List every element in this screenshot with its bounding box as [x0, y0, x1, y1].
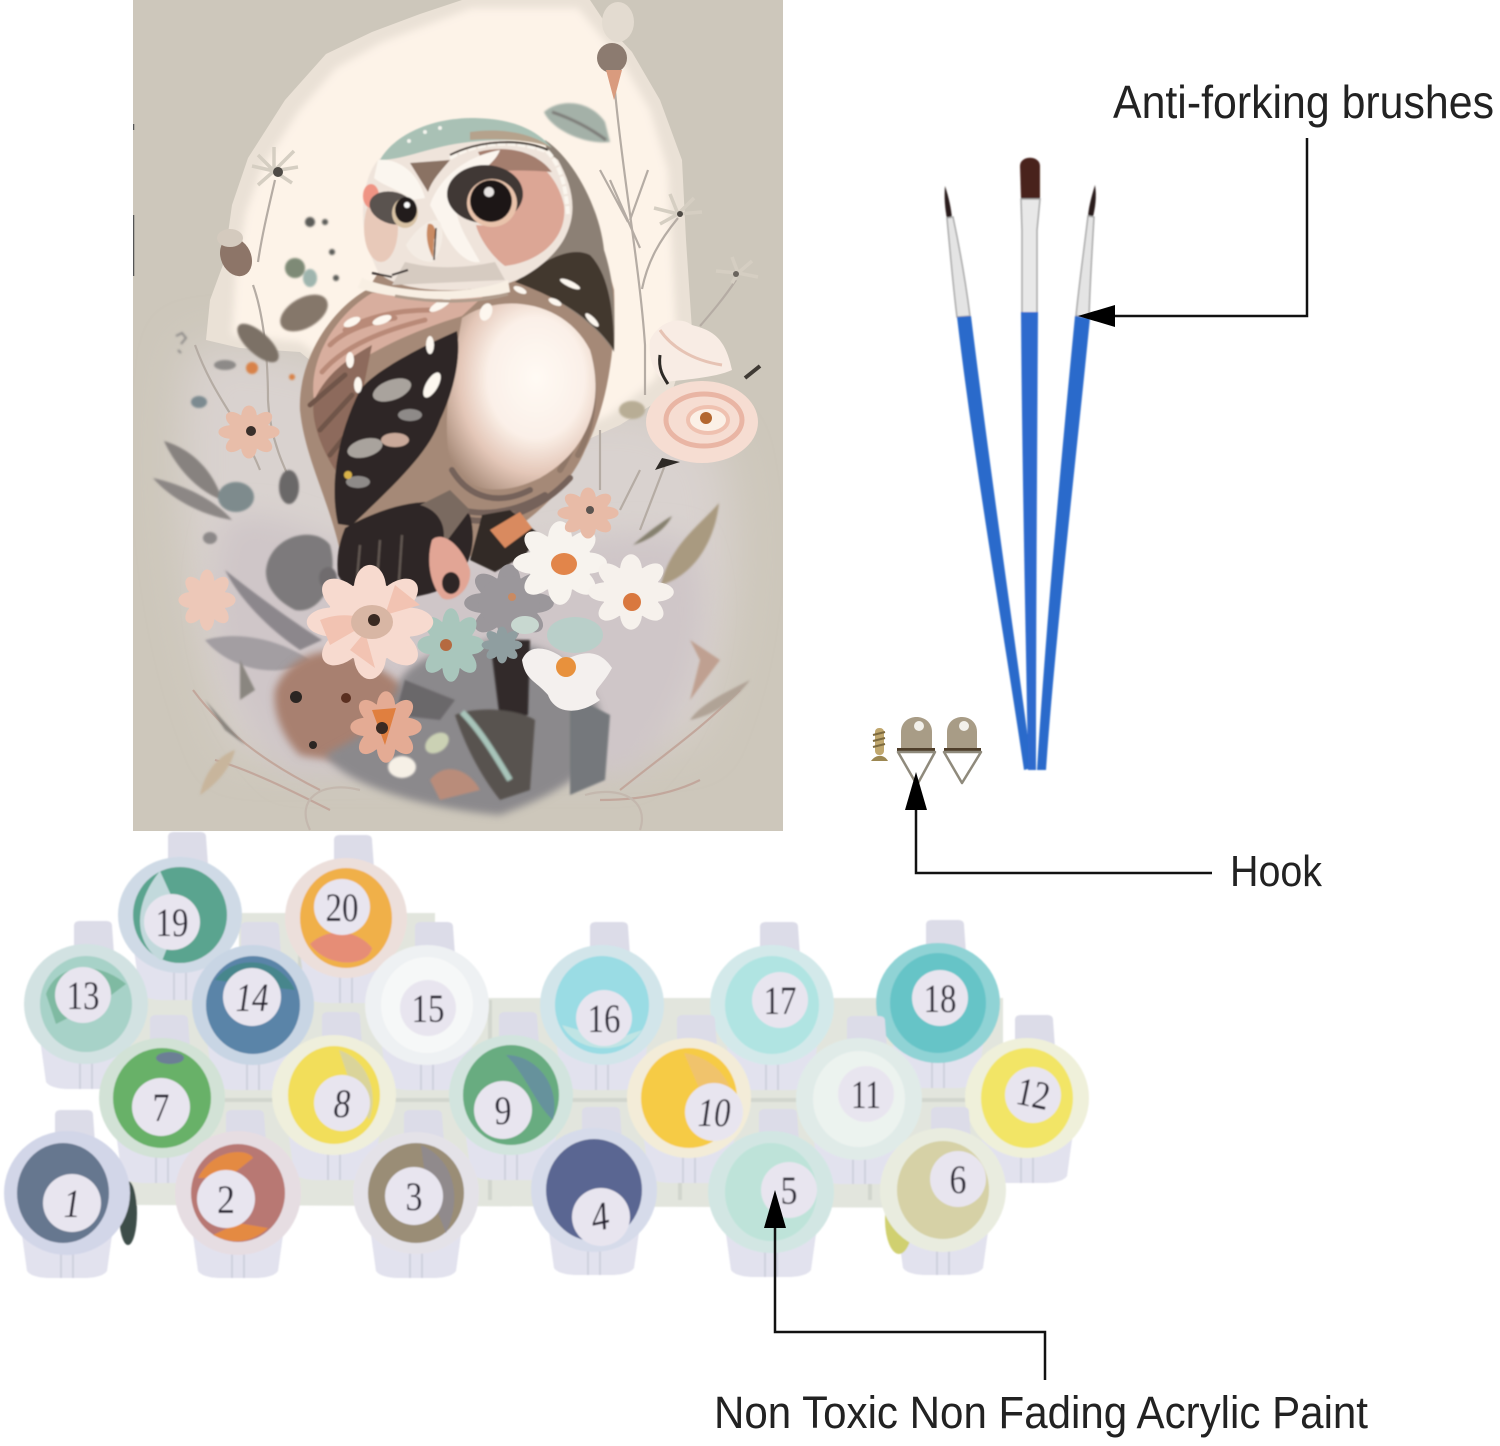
pot 11 — [796, 1016, 922, 1184]
brushes arrow — [1078, 138, 1307, 327]
lilac haze behind flowers — [182, 345, 732, 750]
owl back feathers — [515, 252, 614, 350]
callout: anti-forking brushes — [1078, 76, 1494, 327]
translucent tray — [130, 913, 1003, 1208]
middle brush — [1020, 158, 1040, 770]
brow band — [430, 150, 500, 262]
flowers — [178, 320, 760, 815]
hook label: Hook — [1230, 847, 1323, 896]
white daisy three — [522, 648, 612, 711]
right brush — [1037, 185, 1096, 770]
cream moon halo — [206, 0, 692, 470]
white daisy one — [513, 521, 607, 605]
owl head — [363, 139, 572, 290]
teal cap — [380, 118, 552, 160]
pot 13 — [24, 921, 148, 1089]
pot 11: 11 — [851, 1072, 881, 1117]
owl feet — [429, 537, 470, 599]
grey cluster — [325, 640, 601, 815]
owl — [300, 118, 615, 599]
pot 3: 3 — [406, 1174, 422, 1219]
paint label: Non Toxic Non Fading Acrylic Paint — [714, 1387, 1368, 1438]
pot 17: 17 — [764, 978, 796, 1023]
pot 19 — [118, 832, 242, 1000]
pot 8 — [272, 1012, 396, 1180]
pot 2 — [175, 1110, 301, 1278]
callout: acrylic paint — [714, 1190, 1368, 1438]
panel: brushes — [945, 158, 1096, 770]
pot 14: 14 — [236, 975, 268, 1020]
pot 16 — [540, 922, 664, 1090]
pot 15 — [365, 922, 489, 1090]
pot 12 — [965, 1015, 1089, 1183]
pot 20: 20 — [326, 885, 358, 930]
neck lace — [358, 278, 510, 299]
owl right eye — [470, 180, 512, 222]
hook one — [897, 717, 935, 785]
grey flower — [464, 564, 554, 642]
tray dividers — [150, 930, 1000, 1200]
pot 20 — [285, 835, 407, 1003]
pot 18: 18 — [924, 976, 956, 1021]
pot 9: 9 — [494, 1088, 512, 1133]
pot 6: 6 — [950, 1157, 966, 1202]
canvas background — [133, 0, 783, 831]
owl body — [299, 272, 616, 556]
paint arrow — [764, 1190, 1045, 1380]
pot 6 — [880, 1107, 1006, 1275]
dark edge marks — [133, 124, 134, 276]
pot 8: 8 — [334, 1081, 350, 1126]
rose — [646, 381, 758, 463]
owl shoulder plumage — [313, 290, 490, 400]
pot 2: 2 — [217, 1177, 235, 1222]
pot 4 — [531, 1107, 657, 1275]
dark centre stems — [388, 640, 610, 800]
small pink flowers — [218, 405, 280, 459]
pot 1: 1 — [64, 1181, 80, 1226]
pot 10 — [627, 1015, 751, 1183]
panel: paint pots tray — [4, 832, 1089, 1278]
pot 19: 19 — [156, 900, 188, 945]
owl left eye — [395, 197, 417, 223]
owl belly — [447, 304, 596, 489]
white tulip — [650, 320, 732, 382]
screw — [871, 728, 888, 761]
teal top of daisy three — [547, 617, 603, 653]
pot 15: 15 — [412, 986, 444, 1031]
eye surrounds — [447, 165, 523, 223]
owl beak — [406, 220, 442, 262]
owl tail — [337, 502, 473, 598]
left face — [364, 206, 398, 262]
pot 5: 5 — [780, 1168, 798, 1213]
callout: hook — [905, 772, 1323, 896]
chin feathers — [392, 262, 505, 285]
pot 17 — [710, 922, 834, 1090]
pink daisy — [307, 565, 433, 679]
owl wing — [334, 331, 458, 526]
wildflower stems — [193, 91, 740, 830]
brown bloom mass — [275, 651, 423, 760]
body feather strokes — [310, 310, 593, 521]
pot 16: 16 — [588, 996, 620, 1041]
wing speckles — [345, 374, 422, 488]
pot 14 — [192, 922, 314, 1090]
panel: hooks and screw — [871, 717, 981, 785]
pot 10: 10 — [698, 1090, 730, 1135]
cream moon — [232, 8, 676, 455]
lower lilac wash — [223, 523, 696, 738]
pot 7: 7 — [152, 1085, 170, 1130]
peach bloom — [350, 691, 422, 763]
pot 13: 13 — [66, 973, 100, 1018]
white daisy two — [588, 554, 674, 630]
hook arrow — [905, 772, 1212, 873]
panel: owl painting — [133, 0, 783, 831]
head back feathers — [544, 140, 616, 352]
pot 7 — [99, 1015, 225, 1183]
hook two — [944, 717, 981, 783]
dandelions and buds — [214, 2, 758, 283]
pot 12: 12 — [1012, 1068, 1054, 1119]
pot 4: 4 — [586, 1193, 613, 1240]
pot 18 — [876, 920, 1000, 1088]
right cheek — [476, 170, 565, 266]
pot 9 — [449, 1012, 573, 1180]
pot 1 — [4, 1110, 137, 1278]
teal bloom — [417, 608, 485, 682]
pot 3 — [353, 1110, 479, 1278]
pot 5 — [708, 1109, 834, 1277]
foliage: leaves and pebbles — [153, 103, 750, 795]
left brush — [945, 186, 1032, 770]
